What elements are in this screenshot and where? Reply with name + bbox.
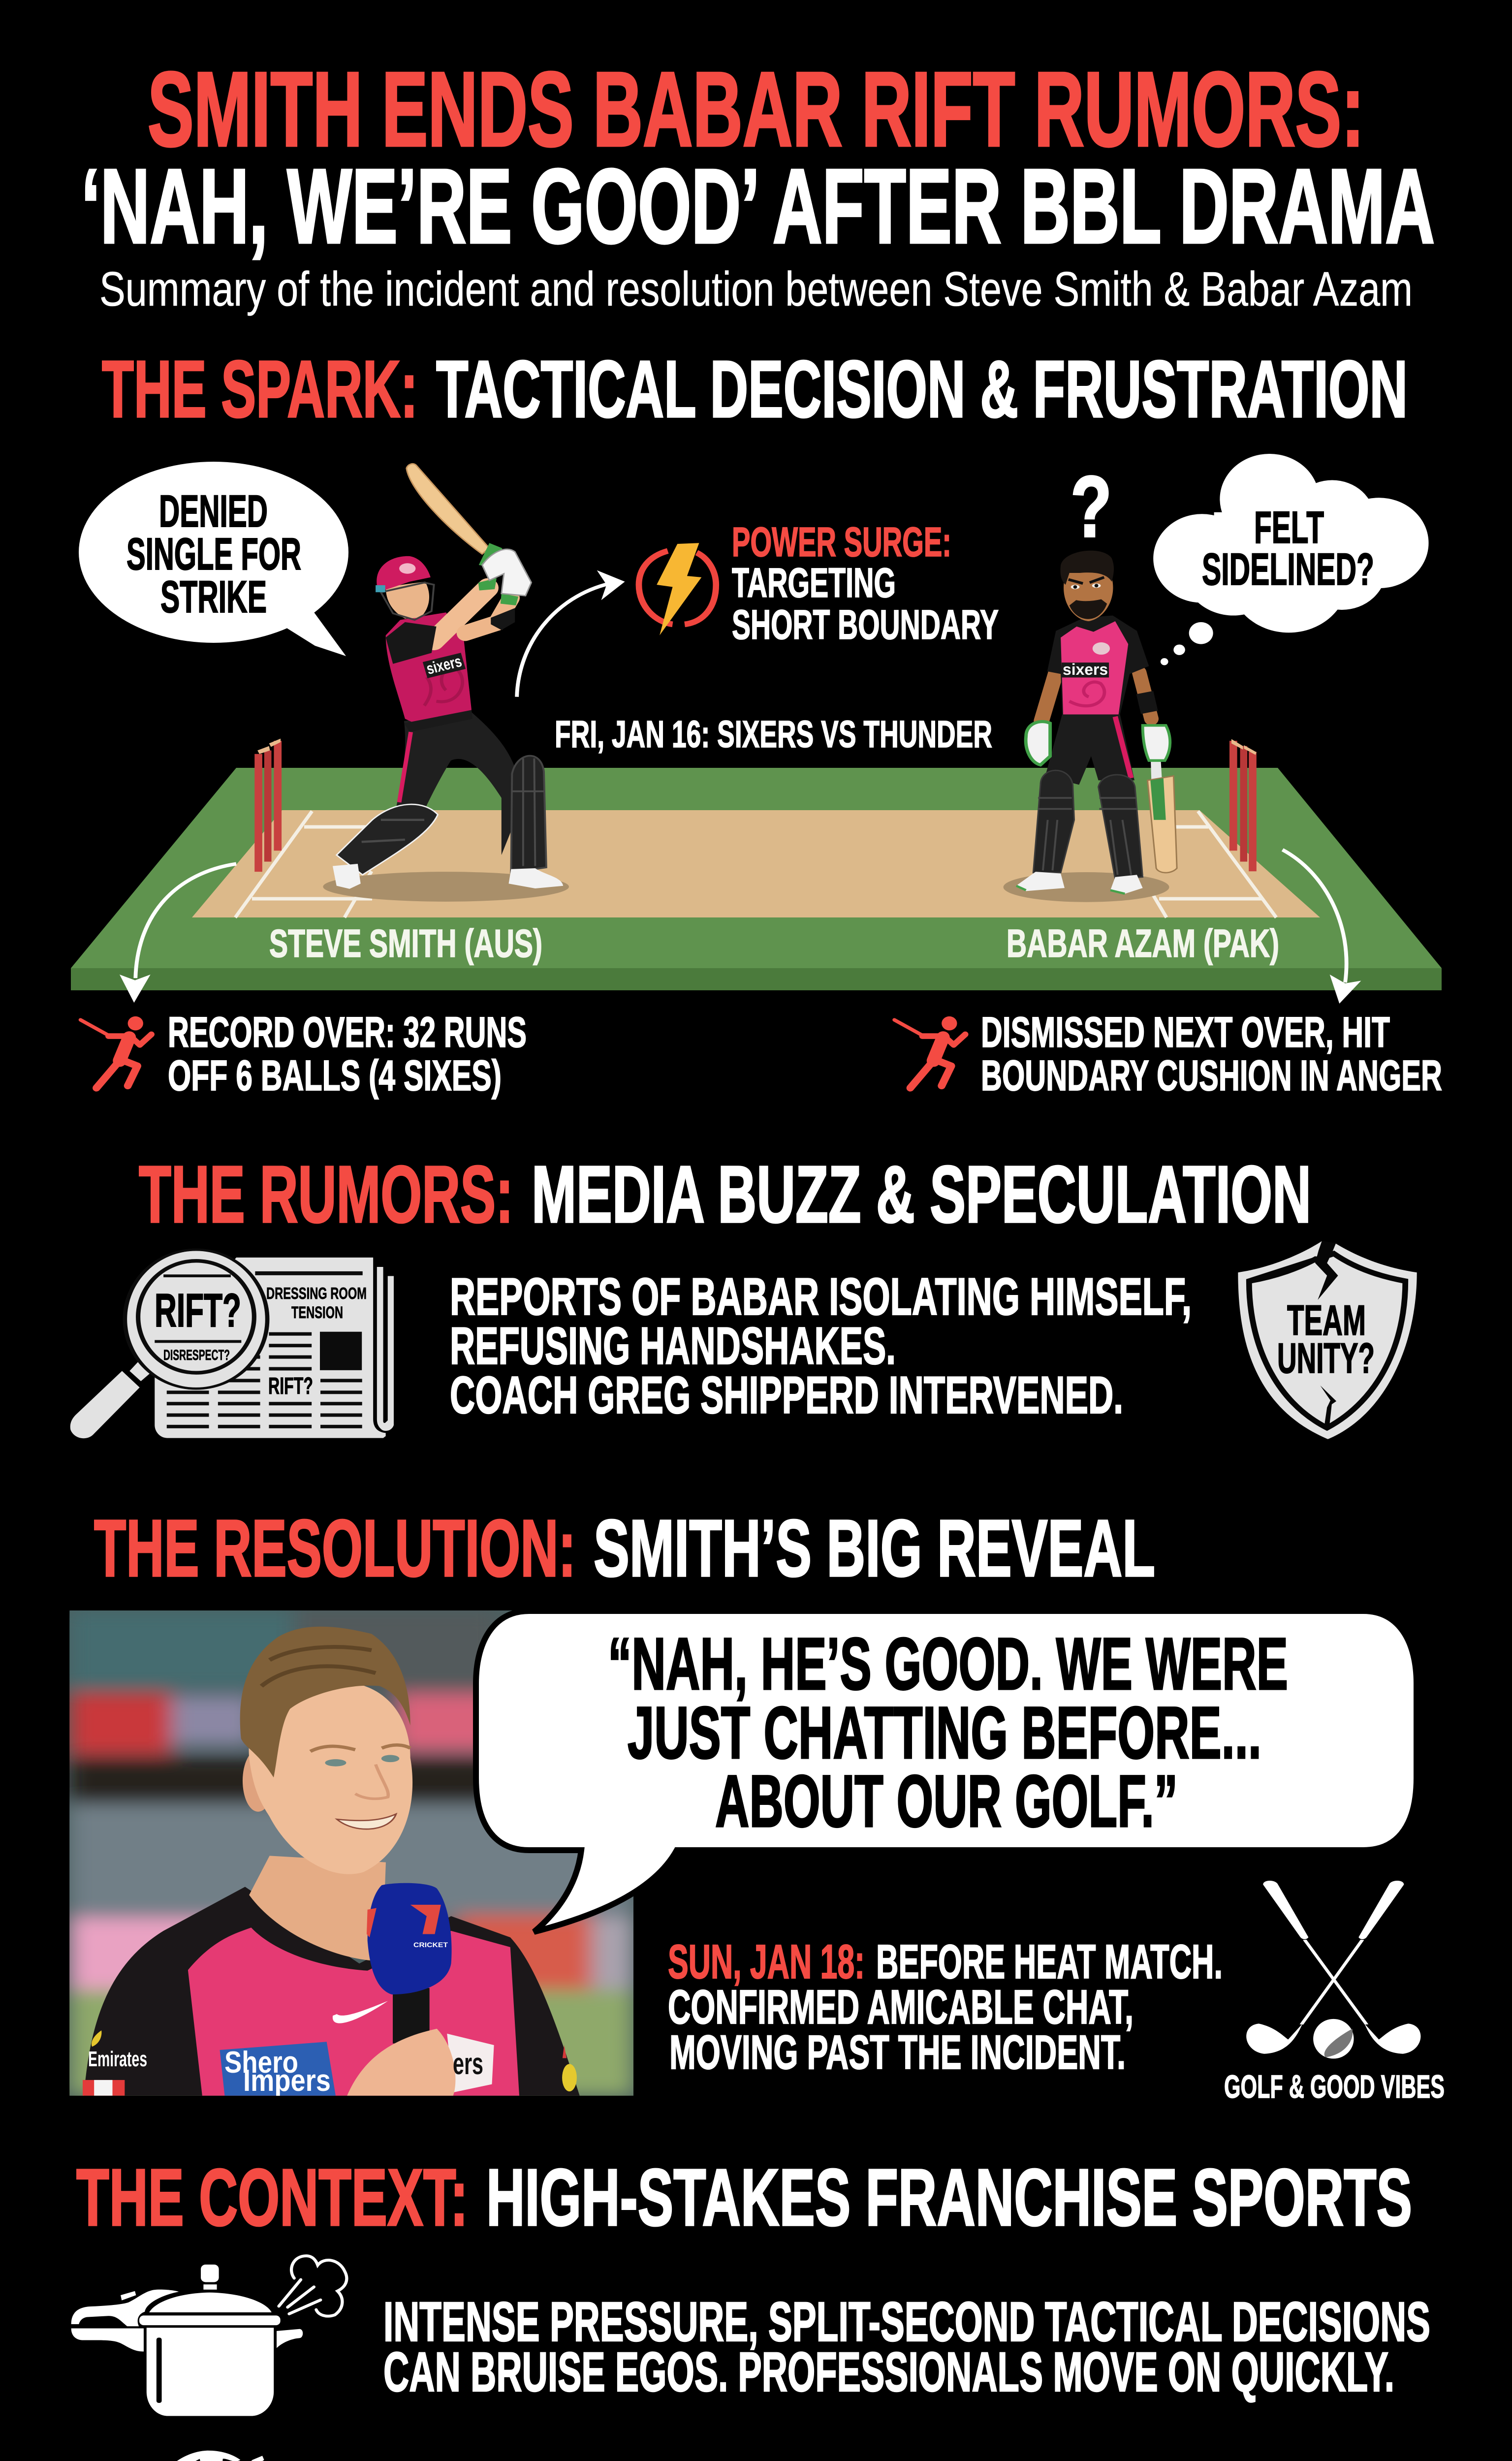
- legs: [1045, 714, 1134, 785]
- bat: [407, 464, 489, 554]
- chest patch: [447, 2034, 494, 2092]
- jersey label: sixers: [424, 652, 464, 678]
- icon: cracked shield: [1238, 1241, 1417, 1439]
- icon: newspaper and magnifier: DISRESPECT?: [163, 1347, 230, 1363]
- speech bubble: denied single: SINGLE FOR: [126, 529, 301, 579]
- text: sunday resolution: BEFORE HEAT MATCH.: [876, 1935, 1223, 1988]
- jersey: [84, 1887, 580, 2096]
- icon: question mark: ?: [1071, 459, 1112, 555]
- heading: the rumors: [139, 1149, 1311, 1239]
- jersey label: [422, 652, 466, 678]
- date label: FRI, JAN 16: SIXERS VS THUNDER: [555, 713, 992, 756]
- heading: the spark: THE SPARK:: [102, 344, 418, 434]
- photo: Steve Smith interview: [69, 1610, 633, 2098]
- heading: the resolution: [94, 1503, 1155, 1593]
- torso: [386, 612, 472, 723]
- neck: [249, 1856, 386, 1961]
- heading: the spark: [102, 344, 1408, 434]
- icon: pressure cooker: [71, 2256, 346, 2416]
- legs: [396, 711, 520, 855]
- arms: [1041, 673, 1056, 721]
- callout: power surge: TARGETING: [732, 560, 896, 606]
- panel: cricket field: [71, 768, 1442, 990]
- text: record over: [168, 1009, 527, 1100]
- head: [1064, 566, 1113, 621]
- icon: globe and broken wicket: [138, 2451, 298, 2461]
- callout: power surge: SHORT BOUNDARY: [732, 601, 999, 648]
- text: sunday resolution: CONFIRMED AMICABLE CHAT,: [668, 1980, 1134, 2034]
- photo: Steve Smith interview: Emirates: [88, 2047, 147, 2071]
- label on jersey: sixers: [1063, 661, 1108, 679]
- arrow: to dismissed: [1283, 850, 1361, 1004]
- microphone: [393, 1988, 430, 2044]
- photo: Steve Smith interview: CRICKET: [413, 1941, 448, 1949]
- text: reports: COACH GREG SHIPPERD INTERVENED.: [450, 1365, 1123, 1424]
- heading: the rumors: THE RUMORS:: [139, 1149, 513, 1239]
- pitch: [192, 810, 1320, 917]
- speech bubble: denied single: STRIKE: [160, 572, 267, 622]
- text: sunday resolution: SUN, JAN 18:: [668, 1935, 865, 1988]
- photo: Steve Smith interview: Impers: [243, 2064, 331, 2098]
- illustration: left wickets: [254, 739, 282, 872]
- icon: newspaper and magnifier: RIFT?: [268, 1373, 313, 1399]
- swoosh: [333, 2001, 388, 2023]
- text: record over: OFF 6 BALLS (4 SIXES): [168, 1052, 502, 1100]
- features: [325, 1759, 346, 1767]
- player label: Babar Azam: BABAR AZAM (PAK): [1007, 921, 1279, 965]
- thought cloud: felt sidelined: FELT: [1254, 503, 1324, 553]
- icon: newspaper and magnifier: RIFT?: [155, 1284, 241, 1337]
- icon: cracked shield: UNITY?: [1277, 1335, 1375, 1382]
- callout: power surge: [732, 519, 999, 648]
- hair: [240, 1627, 410, 1777]
- sponsor box: [220, 2042, 336, 2096]
- title: [81, 50, 1435, 265]
- magnifier handle: [129, 1361, 151, 1381]
- heading: the resolution: SMITH’S BIG REVEAL: [594, 1503, 1155, 1593]
- text: record over: RECORD OVER: 32 RUNS: [168, 1009, 527, 1056]
- head: [386, 582, 429, 619]
- player label: Steve Smith: STEVE SMITH (AUS): [269, 921, 542, 965]
- photo: Steve Smith interview: ers: [453, 2047, 483, 2081]
- illustration: right wickets: [1229, 739, 1257, 871]
- icon: newspaper and magnifier: TENSION: [291, 1303, 343, 1322]
- speech bubble: smith quote: ABOUT OUR GOLF.”: [715, 1760, 1178, 1842]
- heading: the context: THE CONTEXT:: [76, 2152, 468, 2242]
- bat: [1150, 747, 1162, 780]
- arrow: to power surge: [517, 570, 625, 697]
- thought cloud: felt sidelined: [1153, 454, 1429, 665]
- arms: [434, 588, 488, 640]
- icon: newspaper and magnifier: DRESSING ROOM: [266, 1284, 367, 1302]
- photo: Steve Smith interview: Shero: [224, 2046, 298, 2080]
- icon: newspaper and magnifier: [70, 1249, 394, 1438]
- gloves: [478, 543, 518, 605]
- text: dismissed: [981, 1009, 1442, 1100]
- thought cloud: felt sidelined: SIDELINED?: [1202, 544, 1374, 595]
- text: intense pressure: [383, 2291, 1430, 2403]
- player: Steve Smith batting: [323, 464, 569, 902]
- speech bubble: smith quote: [476, 1611, 1417, 1932]
- face: [249, 1681, 412, 1874]
- sleeve marks: [92, 2030, 101, 2047]
- heading: the resolution: THE RESOLUTION:: [94, 1503, 576, 1593]
- torso: [1047, 616, 1149, 714]
- text: sunday resolution: [668, 1935, 1223, 2079]
- icon: red batter left: [81, 1016, 152, 1088]
- speech bubble: denied single: [79, 462, 348, 656]
- heading: the context: [76, 2152, 1412, 2242]
- text: reports: REFUSING HANDSHAKES.: [450, 1316, 896, 1375]
- arrow: to record over: [120, 864, 236, 1003]
- icon: red batter right: [894, 1016, 965, 1088]
- gloves: [1026, 722, 1050, 765]
- ear: [242, 1756, 265, 1812]
- player: Babar Azam standing: [1004, 551, 1177, 902]
- speech bubble: denied single: DENIED: [159, 486, 268, 536]
- shoes: [1017, 872, 1065, 891]
- text: sunday resolution: MOVING PAST THE INCIDENT.: [669, 2025, 1126, 2079]
- callout: power surge: POWER SURGE:: [732, 519, 951, 565]
- icon: golf clubs and ball: [1224, 1881, 1445, 2105]
- icon: cracked shield: TEAM: [1287, 1297, 1366, 1344]
- hand: [347, 2029, 455, 2096]
- icon: power bolt: [639, 543, 716, 635]
- text: reports: [450, 1267, 1192, 1424]
